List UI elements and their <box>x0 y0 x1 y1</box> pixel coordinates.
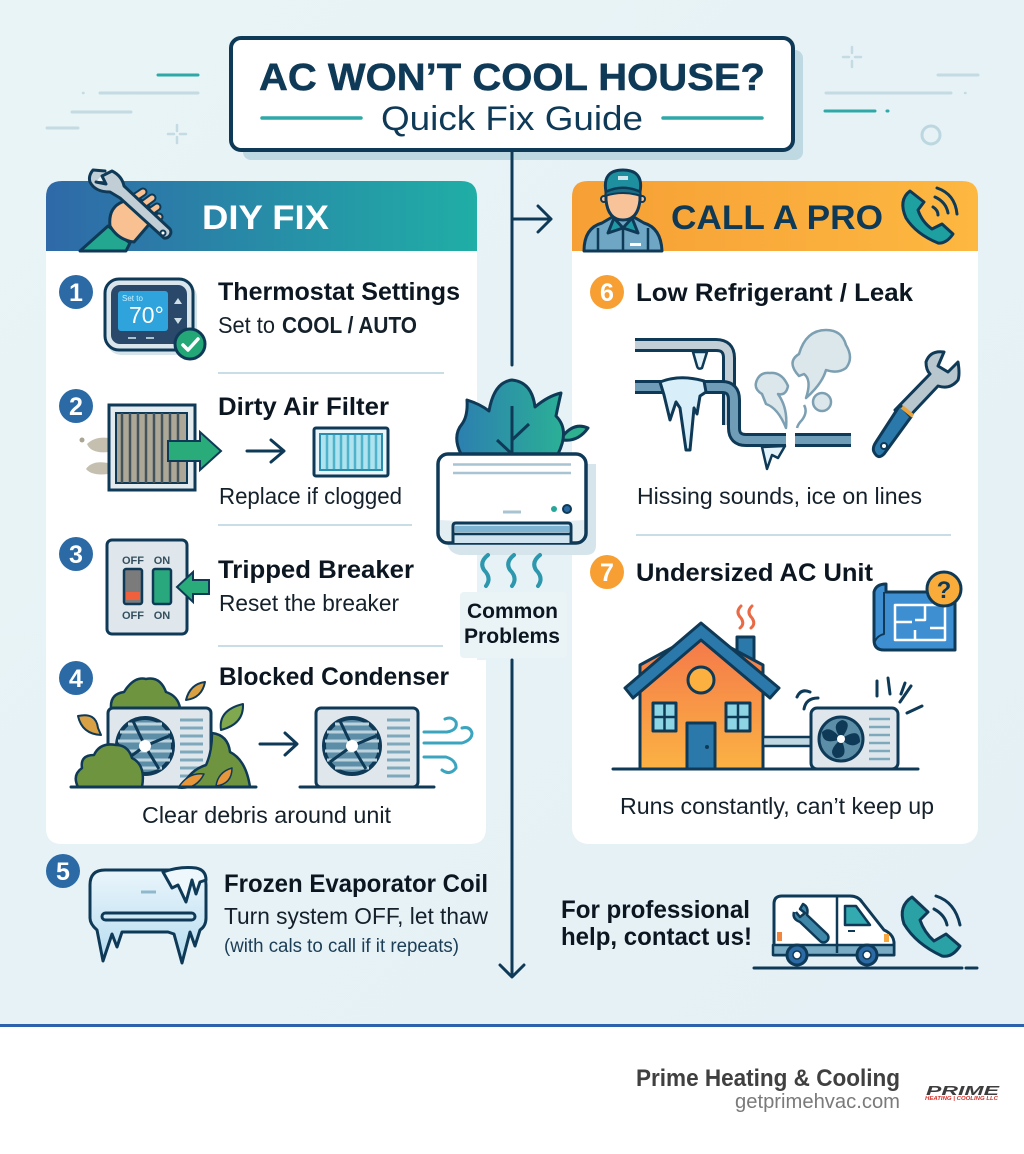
contact text <box>561 896 752 951</box>
footer brand text <box>636 1065 900 1113</box>
pro heading: CALL A PRO <box>671 199 883 237</box>
step 7: undersized AC unit <box>590 555 961 819</box>
icon: thermostat: 70° <box>129 302 164 328</box>
footer band <box>0 1024 1024 1154</box>
step 5 detail: Turn system OFF, let thaw <box>224 903 488 929</box>
contact callout <box>561 896 977 968</box>
step 4: blocked condenser <box>59 661 472 828</box>
step 1 heading: Thermostat Settings <box>218 278 460 306</box>
icon: cooling air waves <box>482 555 541 586</box>
step 7 heading: Undersized AC Unit <box>636 559 874 587</box>
icon: breaker panel: OFF <box>122 610 144 622</box>
step 5: frozen evaporator coil <box>46 854 488 963</box>
step 3: tripped breaker: 3 <box>69 541 83 569</box>
icon: blueprint with question mark <box>874 572 961 650</box>
icon: technician <box>584 170 662 251</box>
step 6: low refrigerant: 6 <box>600 279 614 307</box>
icon: phone <box>902 896 960 956</box>
icon: service van <box>754 896 977 968</box>
icon: hand with wrench <box>80 170 171 251</box>
icon: condenser blocked by bushes, then clear <box>71 679 472 788</box>
common problems label <box>460 592 567 658</box>
step 6 heading: Low Refrigerant / Leak <box>636 279 913 307</box>
step 4 heading: Blocked Condenser <box>219 663 449 691</box>
common problems label: Problems <box>464 625 560 648</box>
footer logo: HEATING | COOLING LLC <box>925 1096 998 1102</box>
step 3 detail: Reset the breaker <box>219 590 399 616</box>
step 2 heading: Dirty Air Filter <box>218 393 389 421</box>
icon: breaker panel <box>107 540 209 634</box>
icon: breaker panel: ON <box>154 610 170 622</box>
step 7: undersized AC unit: 7 <box>600 559 614 587</box>
panel: call a pro <box>572 170 978 844</box>
subtitle: Quick Fix Guide <box>381 100 643 138</box>
step 7 detail: Runs constantly, can’t keep up <box>620 793 934 819</box>
connector line with arrows <box>500 150 551 977</box>
DIY heading: DIY FIX <box>202 199 329 237</box>
common problems label: Common <box>467 600 558 623</box>
icon: phone <box>903 188 957 243</box>
contact text: help, contact us! <box>561 923 752 951</box>
DIY header band <box>46 181 477 251</box>
step 4: blocked condenser: 4 <box>69 665 83 693</box>
step 1 detail <box>218 312 417 338</box>
pro header band <box>572 181 978 251</box>
contact text: For professional <box>561 896 750 924</box>
decorative header marks <box>47 47 978 144</box>
step 1 detail: COOL / AUTO <box>282 312 417 338</box>
step 3: tripped breaker <box>59 537 414 634</box>
step 5 note: (with cals to call if it repeats) <box>224 936 459 957</box>
step 1: thermostat settings: 1 <box>69 279 83 307</box>
icon: dirty filter and clean filter <box>80 405 388 490</box>
step 1: thermostat settings <box>59 275 460 359</box>
icon: thermostat <box>105 279 205 359</box>
icon: house with running outdoor unit <box>613 606 922 769</box>
footer brand text: Prime Heating & Cooling <box>636 1065 900 1092</box>
central AC unit <box>438 380 596 586</box>
step 3 heading: Tripped Breaker <box>218 556 414 584</box>
icon: thermostat: Set to <box>122 294 143 303</box>
step 6 detail: Hissing sounds, ice on lines <box>637 483 922 509</box>
step 2 detail: Replace if clogged <box>219 483 402 509</box>
icon: blueprint with question mark: ? <box>937 577 951 604</box>
step 2: dirty air filter: 2 <box>69 393 83 421</box>
icon: leaf cluster <box>457 380 588 454</box>
footer logo: PRIME <box>926 1083 1000 1098</box>
footer logo <box>925 1083 1000 1102</box>
icon: leaking iced pipes and wrench <box>635 330 959 469</box>
footer brand text: getprimehvac.com <box>735 1091 900 1113</box>
step 5: frozen evaporator coil: 5 <box>56 858 70 886</box>
icon: breaker panel: ON <box>154 555 170 567</box>
step 6: low refrigerant <box>590 275 959 509</box>
icon: frozen AC unit <box>90 868 206 963</box>
title text: AC WON’T COOL HOUSE? <box>259 57 765 99</box>
step 4 detail: Clear debris around unit <box>142 802 392 828</box>
step 5 heading: Frozen Evaporator Coil <box>224 870 488 898</box>
title box <box>231 38 803 160</box>
panel: DIY fix <box>46 170 486 844</box>
step 1 detail: Set to <box>218 312 275 338</box>
icon: breaker panel: OFF <box>122 555 144 567</box>
step 2: dirty air filter <box>59 389 402 509</box>
